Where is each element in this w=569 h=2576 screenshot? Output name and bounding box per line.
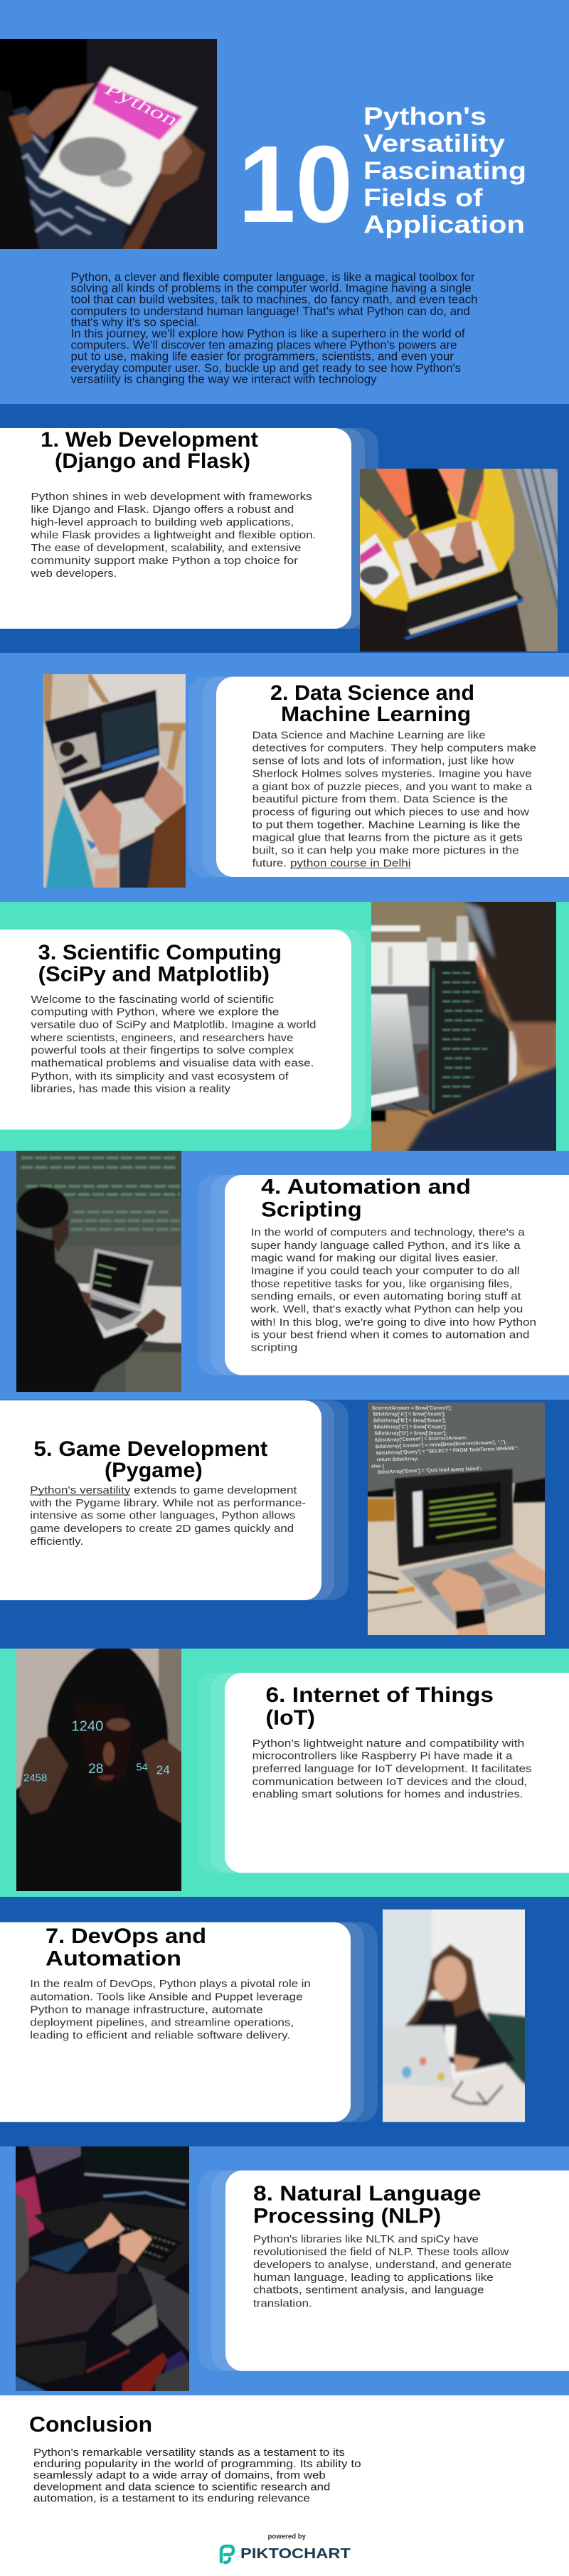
- panel: 4 automation and scripting: [0, 1141, 569, 1402]
- card: [225, 1673, 569, 1873]
- panel: intro header: [0, 0, 569, 404]
- photo: hooded figure with projected digits: 2458: [23, 1773, 47, 1784]
- body text: developers to analyse, understand, and generate: [253, 2260, 511, 2271]
- body text: to put them together. Machine Learning is like the: [252, 819, 521, 831]
- body text: community support make Python a top choice for: [31, 555, 298, 567]
- panel: 6 internet of things: [0, 1639, 569, 1900]
- footer: Piktochart branding: [221, 2533, 351, 2562]
- photo: typing on laptop on yellow chair: [360, 469, 558, 651]
- body text: those repetitive tasks for you, like organising files,: [251, 1279, 512, 1290]
- photo: laptop in front of code monitor: $distArray['D'] = $row['Dnum'];: [374, 1432, 447, 1437]
- panel: 7 devops and automation: [0, 1897, 569, 2146]
- body text: [33, 2447, 361, 2504]
- body text: [252, 730, 536, 869]
- body text: automation. Tools like Ansible and Puppet leverage: [30, 1991, 303, 2003]
- panel: 5 game development: [0, 1393, 569, 1649]
- heading: (Django and Flask): [55, 449, 250, 473]
- card: [0, 428, 351, 629]
- body text: [30, 491, 316, 580]
- body text: [253, 2234, 511, 2309]
- body text: like Django and Flask. Django offers a robust and: [31, 504, 294, 516]
- big number 10: 10: [238, 123, 353, 245]
- body text: work. Well, that's exactly what Python can help you: [250, 1304, 523, 1316]
- body text: Python's lightweight nature and compatibility with: [252, 1738, 524, 1750]
- photo: developer looking at code monitor: [371, 902, 556, 1151]
- heading: (SciPy and Matplotlib): [38, 963, 270, 986]
- heading: 3. Scientific Computing: [38, 941, 282, 964]
- body text: Sherlock Holmes solves mysteries. Imagine you have: [252, 769, 532, 780]
- body text: versatile duo of SciPy and Matplotlib. Imagine a world: [31, 1020, 316, 1031]
- title: Application: [363, 211, 525, 239]
- body text: enduring popularity in the world of programming. Its ability to: [33, 2459, 361, 2470]
- card: [225, 1175, 569, 1375]
- body text: In the world of computers and technology, there's a: [251, 1228, 526, 1239]
- photo: laptop in front of code monitor: $distArray['C'] = $row['Cnum'];: [374, 1425, 447, 1430]
- body text: Welcome to the fascinating world of scientific: [31, 994, 275, 1006]
- body text: Python's versatility extends to game development: [30, 1485, 297, 1496]
- intro paragraph: [71, 270, 478, 385]
- panel: 8 natural language processing: [0, 2137, 569, 2400]
- photo: hooded person typing at dark desk: [16, 2146, 189, 2391]
- panel: 2 data science and machine learning: [0, 653, 569, 902]
- photo: laptop in front of code monitor: $distArray['Error'] = 'Quiz load query failed';: [378, 1467, 482, 1475]
- body text: mathematical problems and visualise data with ease.: [31, 1058, 314, 1070]
- footer: Piktochart branding: powered by: [267, 2533, 306, 2540]
- body text: with! In this blog, we're going to dive into how Python: [250, 1317, 536, 1329]
- body text: enabling smart solutions for homes and industries.: [252, 1789, 523, 1801]
- body text: libraries, has made this vision a reality: [31, 1084, 231, 1095]
- title: Fields of: [363, 184, 483, 212]
- intro paragraph: everyday computer user. So, buckle up and get ready to see how Python's: [71, 361, 461, 375]
- heading: [270, 681, 474, 726]
- title: Python's: [363, 102, 486, 130]
- photo: hooded figure with projected digits: 24: [156, 1763, 170, 1777]
- body text: magical glue that learns from the picture as it gets: [252, 833, 523, 844]
- intro paragraph: solving all kinds of problems in the computer world. Imagine having a single: [71, 282, 472, 295]
- body text: intensive as some other languages, Python allows: [30, 1511, 295, 1522]
- body text: Imagine if you could teach your computer to do all: [251, 1266, 520, 1277]
- icon: Piktochart logo mark: [221, 2546, 233, 2562]
- body text: translation.: [253, 2298, 312, 2309]
- photo: laptop in front of code monitor: $correctAnswer = $row['Correct'];: [372, 1406, 452, 1411]
- photo: laptop in front of code monitor: $distArray['A'] = $row['Anum'];: [373, 1412, 445, 1417]
- intro paragraph: put to use, making life easier for programmers, scientists, and even your: [71, 350, 454, 363]
- body text: Python's libraries like NLTK and spiCy have: [253, 2234, 479, 2245]
- photo: laptop in front of code monitor: $distArray['B'] = $row['Bnum'];: [373, 1419, 446, 1424]
- body text: super handy language called Python, and it's like a: [251, 1240, 521, 1252]
- heading: 1. Web Development: [41, 428, 258, 452]
- body text: [252, 1738, 532, 1801]
- body text: computing with Python, where we explore the: [31, 1007, 279, 1018]
- heading: Conclusion: [29, 2412, 152, 2437]
- body text: process of figuring out which pieces to use and how: [252, 807, 529, 819]
- panel: conclusion: [0, 2395, 569, 2576]
- heading: 6. Internet of Things: [266, 1683, 494, 1707]
- body text: high-level approach to building web applications,: [31, 517, 294, 528]
- body text: [250, 1228, 536, 1354]
- card: [0, 1922, 351, 2122]
- body text: is your best friend when it comes to automation and: [251, 1330, 529, 1341]
- photo: hooded figure with projected digits: [16, 1649, 181, 1891]
- body text: Python's remarkable versatility stands as a testament to its: [33, 2447, 345, 2459]
- title: Fascinating: [363, 157, 526, 185]
- body text: magic wand for making our digital lives easier.: [251, 1253, 499, 1265]
- photo: laptop in front of code monitor: $distArray['Answer'] = rtrim($row[$correctAnswer], ",");: [375, 1440, 507, 1449]
- intro paragraph: that's why it's so special.: [71, 316, 200, 329]
- heading: 2. Data Science and: [270, 681, 474, 705]
- heading: 8. Natural Language: [253, 2182, 481, 2205]
- panel: 1 web development: [0, 404, 569, 663]
- heading: 4. Automation and: [261, 1175, 471, 1199]
- body text: communication between IoT devices and the cloud,: [252, 1777, 527, 1788]
- body text: deployment pipelines, and streamline operations,: [30, 2017, 294, 2028]
- body text: Data Science and Machine Learning are like: [252, 730, 486, 741]
- body text: scripting: [251, 1343, 297, 1354]
- body text: game developers to create 2D games quickly and: [30, 1523, 294, 1535]
- photo: man at laptop before data wall: [16, 1151, 181, 1392]
- body text: human language, leading to applications like: [253, 2272, 494, 2284]
- intro paragraph: In this journey, we'll explore how Python is like a superhero in the world of: [71, 327, 465, 340]
- title: [363, 102, 526, 239]
- heading: Machine Learning: [281, 703, 471, 726]
- heading: (Pygame): [105, 1459, 203, 1482]
- photo: laptop in front of code monitor: [368, 1403, 545, 1635]
- body text: Python, with its simplicity and vast ecosystem of: [31, 1071, 289, 1082]
- body text: with the Pygame library. While not as performance-: [29, 1498, 306, 1509]
- photo: hooded figure with projected digits: 1240: [71, 1718, 103, 1734]
- heading: Automation: [46, 1947, 181, 1970]
- body text: a giant box of puzzle pieces, and you want to make a: [252, 782, 533, 793]
- body text: efficiently.: [30, 1536, 83, 1548]
- photo: laptop in front of code monitor: return $distArray;: [377, 1457, 419, 1462]
- heading: (IoT): [266, 1706, 315, 1730]
- body text: while Flask provides a lightweight and flexible option.: [30, 530, 316, 541]
- body text: future. python course in Delhi: [252, 858, 411, 869]
- body text: In the realm of DevOps, Python plays a pivotal role in: [30, 1979, 311, 1990]
- photo: laptop with video call and code: [43, 674, 186, 888]
- photo: hooded figure with projected digits: 54: [136, 1762, 148, 1774]
- body text: automation, is a testament to its enduring relevance: [33, 2493, 310, 2504]
- card: [216, 677, 569, 877]
- card: [0, 930, 351, 1129]
- heading: [261, 1175, 471, 1222]
- body text: chatbots, sentiment analysis, and language: [253, 2285, 484, 2296]
- intro paragraph: computers to understand human language! That's what Python can do, and: [71, 304, 470, 318]
- body text: where scientists, engineers, and researchers have: [30, 1033, 293, 1044]
- photo: hands holding Python book: Python: [100, 80, 184, 129]
- title: Versatility: [363, 129, 506, 158]
- body text: Python shines in web development with frameworks: [31, 491, 312, 503]
- body text: beautiful picture from them. Data Science is the: [252, 794, 508, 806]
- heading: [33, 1437, 267, 1482]
- heading: [41, 428, 258, 473]
- body text: detectives for computers. They help computers make: [252, 743, 536, 754]
- body text: sending emails, or even automating boring stuff at: [251, 1292, 521, 1303]
- intro paragraph: Python, a clever and flexible computer language, is like a magical toolbox for: [71, 270, 475, 284]
- footer: Piktochart branding: PIKTOCHART: [240, 2545, 351, 2562]
- body text: sense of lots and lots of information, just like how: [252, 756, 514, 767]
- intro paragraph: computers. We'll discover ten amazing places where Python's powers are: [71, 339, 457, 352]
- body text: built, so it can help you make more pictures in the: [252, 846, 519, 857]
- card: [0, 1400, 321, 1600]
- body text: Python to manage infrastructure, automate: [30, 2004, 263, 2016]
- panel: 3 scientific computing: [0, 893, 569, 1163]
- heading: [46, 1925, 206, 1970]
- heading: 5. Game Development: [33, 1437, 267, 1461]
- body text: revolutionised the field of NLP. These tools allow: [253, 2247, 509, 2258]
- body text: seamlessly adapt to a wide array of domains, from web: [33, 2470, 326, 2481]
- body text: web developers.: [30, 568, 117, 580]
- photo: laptop in front of code monitor: $distArray['Query'] = "SELECT * FROM TechTerms WHERE";: [376, 1446, 519, 1456]
- heading: Scripting: [261, 1198, 362, 1222]
- heading: [38, 941, 282, 986]
- body text: The ease of development, scalability, and extensive: [31, 543, 301, 554]
- intro paragraph: tool that can build websites, talk to machines, do fancy math, and even teach: [71, 293, 478, 307]
- heading: [266, 1683, 494, 1730]
- body text: microcontrollers like Raspberry Pi have made it a: [252, 1751, 513, 1762]
- photo: woman working on laptop at table: [383, 1909, 525, 2122]
- card: [225, 2171, 569, 2371]
- photo: hooded figure with projected digits: 28: [88, 1762, 104, 1777]
- photo: laptop in front of code monitor: else {: [371, 1464, 385, 1469]
- body text: [30, 994, 316, 1095]
- intro paragraph: versatility is changing the way we interact with technology: [71, 372, 377, 385]
- body text: preferred language for IoT development. It facilitates: [252, 1764, 532, 1775]
- body text: [29, 1485, 306, 1548]
- body text: powerful tools at their fingertips to solve complex: [31, 1045, 294, 1057]
- heading: [253, 2182, 481, 2228]
- photo: laptop in front of code monitor: $distArray['Correct'] = $correctAnswer;: [375, 1436, 468, 1443]
- body text: leading to efficient and reliable software delivery.: [30, 2030, 290, 2041]
- heading: 7. DevOps and: [46, 1925, 206, 1948]
- body text: development and data science to scientific research and: [33, 2481, 330, 2493]
- heading: Processing (NLP): [253, 2205, 441, 2228]
- body text: [30, 1979, 311, 2041]
- photo: hands holding Python book: [0, 39, 217, 249]
